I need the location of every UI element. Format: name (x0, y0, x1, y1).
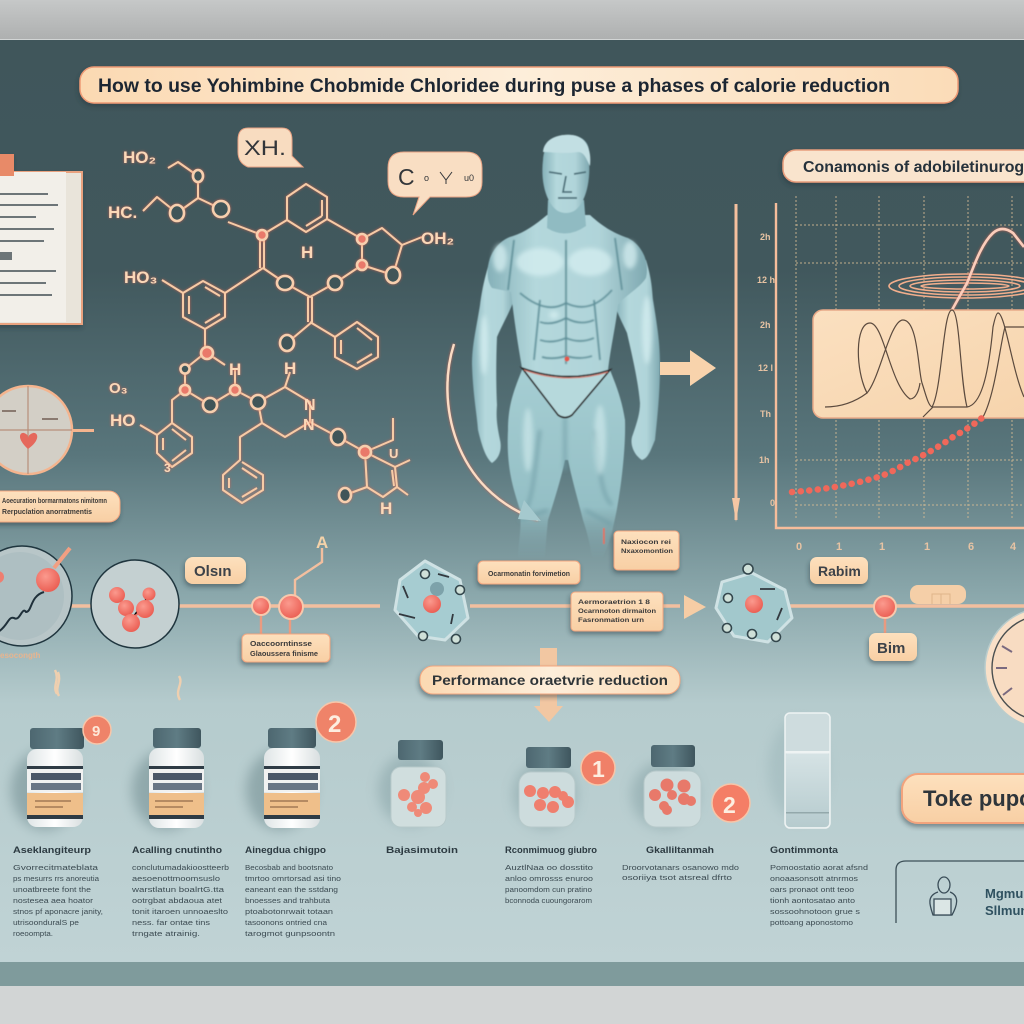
label upper right: Nxaxomontion (621, 548, 673, 555)
molecule labels: U (389, 446, 398, 461)
number badge 2 (316, 702, 356, 742)
leg shading (520, 417, 612, 525)
column 2: tonit itaroen unnoaeslto (132, 907, 228, 916)
bottle 2 (132, 728, 204, 830)
grid (796, 196, 1024, 520)
speech bubble C: u0 (464, 173, 474, 183)
ring molecule 1 (395, 561, 468, 644)
y labels: 12 h (757, 275, 775, 285)
legs (508, 370, 625, 557)
number badge: 9 (92, 723, 100, 740)
molecule atoms (170, 170, 400, 502)
face (549, 172, 586, 198)
ellipse rings (889, 274, 1024, 298)
circle: cluster (91, 560, 179, 648)
bottle 1 (11, 728, 84, 830)
column 1: unoatbreete font the (13, 885, 91, 894)
step captions (13, 845, 868, 938)
column 3 (245, 845, 341, 938)
column 5: Rconmimuog giubro (505, 845, 597, 856)
column 7: Gontimmonta (770, 845, 839, 856)
column 5 (505, 845, 597, 905)
molecule labels: H (301, 243, 313, 262)
small arrow (684, 595, 706, 619)
molecule labels: N (304, 397, 316, 414)
end pill (910, 585, 966, 604)
column 2: warstlatun boalrtG.tta (131, 885, 225, 894)
heart chart circle (0, 386, 94, 474)
squiggles (55, 670, 180, 700)
column 2 (131, 845, 229, 938)
left note pill: Aoecuration bormarmatons nimitomn (2, 498, 107, 505)
jar 3 (631, 745, 701, 829)
label Bim: Bim (877, 640, 905, 657)
column 5: bconnoda cuoungorarom (505, 896, 592, 905)
molecule labels: H (284, 359, 296, 378)
left note pill: Rerpuclation anorratmentis (2, 509, 92, 516)
label Olsin (185, 557, 246, 584)
molecule labels: HO (110, 411, 136, 430)
molecule labels: H (380, 499, 392, 518)
column 5: panoomdom cun pratino (505, 885, 592, 894)
label center: Ocarnnoton dirmaiton (578, 608, 656, 615)
y labels: 4 (1010, 541, 1017, 553)
column 7: sossoohnotoon grue s (770, 907, 860, 916)
axes (776, 203, 1024, 528)
column 6: osoriiya tsot atsreal dfrto (622, 873, 732, 882)
column 1: utrisoonduralS pe (13, 918, 79, 927)
column 2: conclutumadakioostteerb (132, 863, 229, 872)
label center: Aermoraetrion 1 8 (578, 599, 650, 606)
y labels: 1 (836, 541, 842, 553)
right arm (615, 260, 660, 460)
column 6: Gkalliltanmah (646, 845, 714, 856)
label center: Fasronmation urn (578, 617, 644, 624)
column 7: tionh aontosatao anto (770, 896, 855, 905)
molecule labels: H (229, 360, 241, 379)
badge 2b (712, 784, 750, 822)
column 1 (13, 845, 103, 938)
column 3: Becosbab and bootsnato (245, 863, 333, 872)
performance banner (420, 648, 680, 722)
notebook icon (0, 154, 82, 324)
molecule labels: N (303, 417, 315, 434)
column 5: AuztlNaa oo dosstito (505, 863, 593, 872)
pathway line (60, 604, 1024, 608)
label under atoms (242, 634, 330, 662)
chart heading (783, 150, 1024, 182)
person icon (930, 877, 957, 915)
arrow to chart (660, 350, 716, 386)
column 4: Bajasimutoin (386, 845, 458, 856)
y labels (757, 232, 1017, 553)
column 3: tmrtoo omrtorsad asi tino (245, 874, 341, 883)
left arm (472, 260, 516, 463)
label under atoms: Glaoussera finisme (250, 649, 318, 658)
speech bubble XH: XH. (244, 137, 286, 160)
y labels: 1 (924, 541, 930, 553)
y labels: 0 (770, 498, 775, 508)
chart heading: Conamonis of adobiletinuroge (803, 159, 1024, 176)
neck (547, 200, 586, 234)
title banner: How to use Yohimbine Chobmide Chloridee during puse a phases of calorie reduction (98, 76, 890, 97)
column 7: onoaasonsott atnrmos (770, 874, 858, 883)
title banner (80, 67, 958, 103)
molecule labels: OH₂ (421, 229, 454, 248)
column 3: tasoonons ontried cna (245, 918, 328, 927)
node and stem (874, 596, 896, 634)
column 2: aesoenottmoomsuslo (132, 874, 220, 883)
column 6 (622, 845, 739, 882)
column 3: bnoesses and trahbuta (245, 896, 331, 905)
column 1: nostesea aea hoator (13, 896, 94, 905)
person note panel: Mgmu (985, 886, 1023, 901)
label upper right: Naxiocon rei (621, 539, 671, 546)
column 3: Ainegdua chigpo (245, 845, 326, 856)
arrowhead (518, 500, 541, 521)
label Rabim: Rabim (818, 563, 861, 579)
molecule labels: HC. (108, 203, 137, 222)
water glass (768, 713, 830, 828)
label center (571, 592, 663, 631)
molecule labels: HO₃ (124, 268, 157, 287)
column 6: Droorvotanars osanowo mdo (622, 863, 739, 872)
down arrow (734, 204, 738, 520)
number badge 2: 2 (328, 711, 341, 738)
molecule labels: O₃ (109, 380, 128, 397)
column 7: pottoang aponostomo (770, 918, 853, 927)
ring molecule 2 (716, 564, 792, 642)
deltoid and chest highlights (480, 241, 652, 375)
label Olsin: Olsın (194, 563, 232, 580)
leg highlights (523, 405, 606, 475)
clock (985, 608, 1024, 728)
y labels: 1 (879, 541, 885, 553)
column 2: trngate atrainig. (132, 929, 200, 938)
label top middle (478, 561, 580, 584)
column 1: stnos pf aponacre janity, (13, 907, 103, 916)
molecule labels (108, 148, 454, 518)
y labels: 6 (968, 541, 974, 553)
label Rabim (810, 557, 868, 584)
column 1: roeoompta. (13, 929, 53, 938)
column 7 (770, 845, 868, 927)
jar 1 (378, 740, 446, 827)
bottle 3 (246, 728, 320, 830)
circle: chain (0, 546, 72, 660)
curved arrow to figure (447, 344, 538, 520)
speech bubble XH (238, 128, 303, 167)
curves in box (825, 310, 1024, 417)
human figure (472, 135, 660, 557)
jar 2 (513, 747, 577, 829)
speech bubble C: o (424, 173, 429, 183)
torso (488, 215, 647, 384)
molecule labels: 3 (164, 461, 171, 475)
column 7: Pomoostatio aorat afsnd (770, 863, 868, 872)
column 2: ness. far ontae tins (132, 918, 210, 927)
column 1: Gvorrecitmateblata (13, 863, 99, 872)
person note panel (896, 861, 1024, 923)
y labels: 2h (760, 320, 771, 330)
inner box (813, 310, 1024, 418)
badge 1: 1 (592, 756, 605, 782)
speech bubble C (388, 152, 482, 215)
y labels: Th (760, 409, 771, 419)
y labels: 12 l (758, 363, 773, 373)
y labels: 0 (796, 541, 802, 553)
left note pill (0, 491, 120, 522)
molecule diagram (140, 162, 422, 503)
column 1: ps mesurrs rrs anoreutia (13, 874, 100, 883)
column 2: ootrgbat abdaoua atet (132, 896, 223, 905)
label upper right (614, 531, 679, 570)
hair (543, 135, 590, 166)
column 5: anloo omrosss enuroo (505, 874, 593, 883)
column 3: eaneant ean the sstdang (245, 885, 338, 894)
molecule labels: HO₂ (123, 148, 156, 167)
column 7: oars pronaot ontt teoo (770, 885, 854, 894)
badge 1 (581, 751, 615, 785)
circle: chain: esocongth (0, 651, 41, 660)
performance banner: Performance oraetvrie reduction (432, 673, 668, 688)
dotted red curve (792, 417, 983, 492)
linked atoms with stem (252, 533, 328, 640)
briefs (522, 368, 610, 418)
label Bim (869, 633, 917, 661)
chart (732, 196, 1024, 553)
speech bubble C: C (398, 164, 415, 190)
y labels: 2h (760, 232, 771, 242)
take pill button (902, 774, 1024, 823)
label under atoms: Oaccoorntinsse (250, 639, 312, 648)
linked atoms with stem: A (316, 533, 328, 552)
badge 2b: 2 (723, 792, 736, 818)
muscle lines (508, 238, 622, 364)
column 2: Acalling cnutintho (132, 845, 222, 856)
column 3: tarogmot gunpsoontn (245, 929, 335, 938)
head (542, 135, 589, 213)
column 1: Aseklangiteurp (13, 845, 91, 856)
column 3: ptoabotonrwait totaan (245, 907, 333, 916)
red peak curve (952, 229, 1024, 310)
label top middle: Ocarmonatin forvimetion (488, 569, 570, 578)
number badge (83, 716, 111, 744)
y labels: 1h (759, 455, 770, 465)
